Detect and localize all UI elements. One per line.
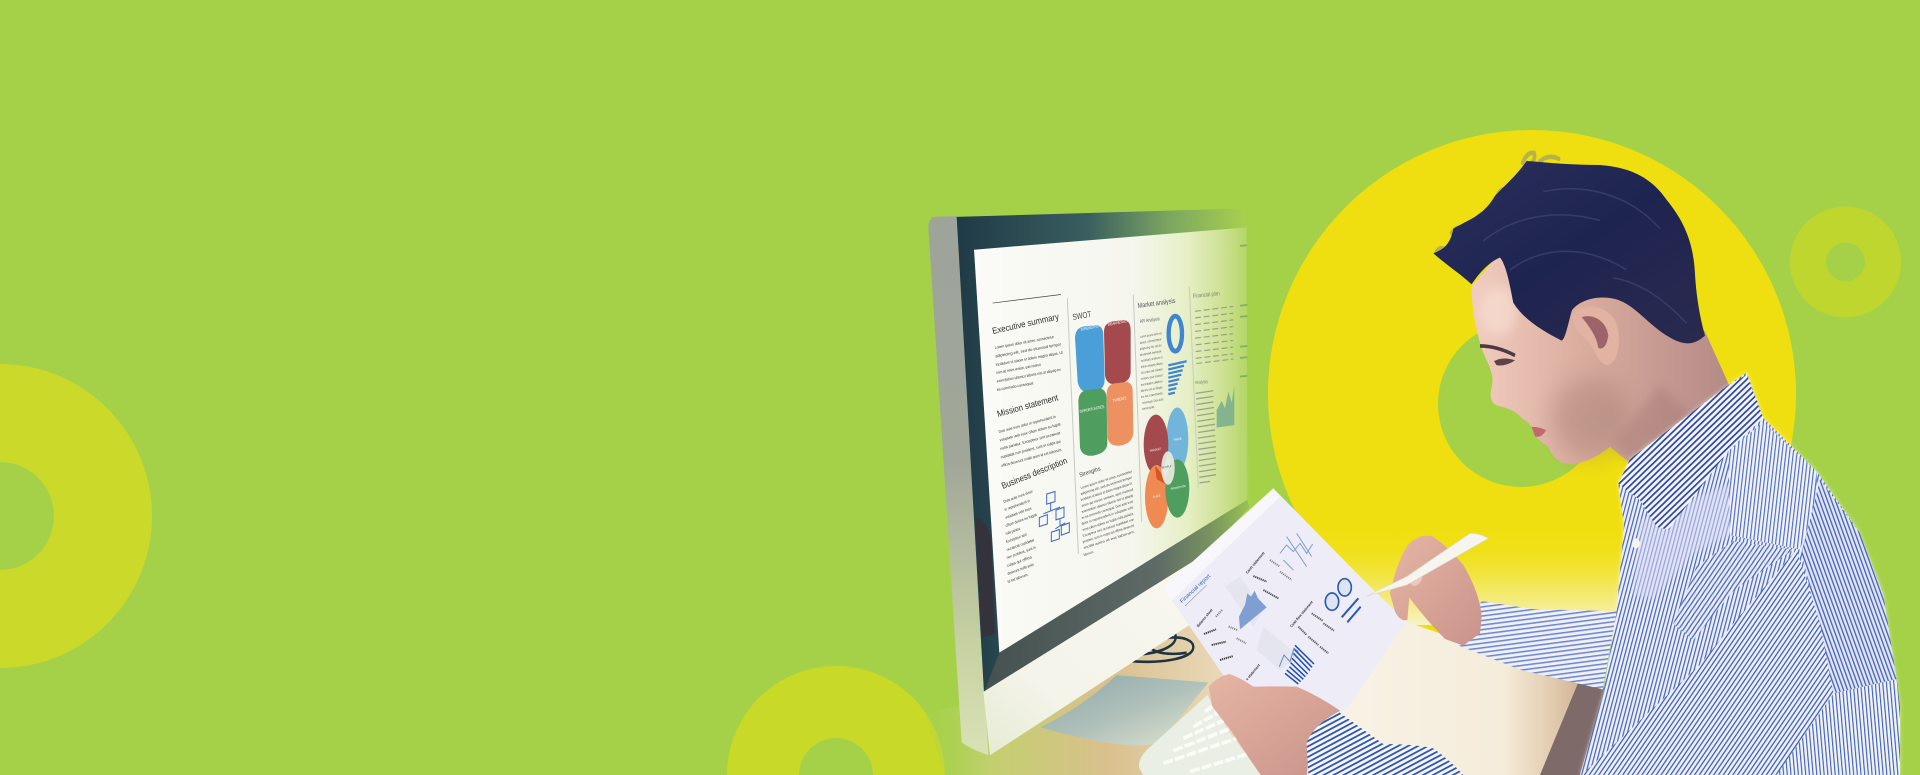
- eye: [1494, 358, 1515, 365]
- analysis text lines: [1196, 391, 1216, 483]
- market analysis column text: amet, consectetur: [1139, 337, 1163, 345]
- glow fading into desk: [1300, 530, 1640, 625]
- left hand: [1209, 674, 1340, 775]
- hair strands: [1483, 189, 1687, 323]
- business description column: deserunt mollit anim: [1007, 562, 1035, 576]
- business description column: id est laborum.: [1007, 572, 1029, 584]
- market analysis column text: ex ea commodo: [1140, 391, 1163, 399]
- business description column: cillum dolore eu fugiat: [1005, 512, 1038, 528]
- mission statement column: Mission statement: [996, 392, 1060, 419]
- SWOT column text: OPPORTUNITIES: [1079, 404, 1105, 414]
- market analysis column text: exercitation ullamco: [1140, 379, 1163, 387]
- hair: [1433, 161, 1705, 343]
- cash flow section: [1289, 600, 1334, 653]
- report title: Financial report: [1179, 573, 1212, 605]
- SWOT column text: incididunt ut labore et dolore magna aliqua Ut: [1080, 481, 1133, 502]
- executive summary column: [991, 311, 1064, 392]
- market analysis column text: PRODUCT: [1149, 447, 1162, 453]
- donut chart: [1169, 316, 1182, 351]
- SWOT column text: [1072, 309, 1136, 557]
- SWOT column text: Lorem ipsum dolor sit amet, consectetur: [1080, 469, 1133, 490]
- paper faint map: [1225, 577, 1300, 670]
- monitor: [928, 209, 1249, 755]
- income statement section: e statement: [1245, 663, 1261, 681]
- mission statement column: voluptate velit esse cillum dolore eu fugiat: [999, 421, 1062, 442]
- cash statement section: [1245, 551, 1292, 598]
- table leg: [1540, 683, 1606, 775]
- market analysis column text: Lorem ipsum dolor sit: [1139, 331, 1162, 339]
- executive summary column: enim ad minim veniam, quis nostrud: [996, 362, 1041, 375]
- desk: [925, 612, 1606, 775]
- cash statement section: Cash statement: [1245, 551, 1266, 575]
- market analysis column text: eiusmod tempor: [1139, 349, 1163, 357]
- shirt button: [1632, 538, 1640, 548]
- market analysis column text: AR Analysis: [1139, 316, 1160, 325]
- screen: [974, 227, 1247, 653]
- business description column: Duis aute irure dolor: [1003, 488, 1034, 504]
- left cuff: [1307, 712, 1463, 775]
- financial plan column text: Analysis: [1195, 379, 1208, 386]
- financial plan table: [1195, 306, 1233, 364]
- mission statement column: Duis aute irure dolor in reprehenderit in: [998, 414, 1056, 434]
- market analysis column text: veniam, quis nostrud: [1140, 373, 1163, 381]
- market analysis column text: PRICE: [1173, 436, 1182, 442]
- SWOT column text: SWOT: [1072, 309, 1092, 322]
- SWOT column text: exercitation ullamco laboris nisi ut aliquip: [1081, 493, 1134, 514]
- executive summary column: incididunt ut labore et dolore magna aliqua. Ut: [995, 350, 1064, 367]
- shirt halo: [1580, 373, 1900, 775]
- market analysis column text: consequat. Duis aute: [1141, 397, 1164, 405]
- SWOT column text: STRENGTHS: [1080, 323, 1099, 332]
- man: [1433, 153, 1900, 775]
- SWOT column text: ex ea commodo consequat. Duis aute irure: [1081, 499, 1134, 520]
- thumb nail: [1407, 569, 1425, 588]
- lower bezel band: [984, 500, 1249, 693]
- executive summary column: exercitation ullamco laboris nisi ut aliquip ex: [996, 367, 1061, 383]
- mission statement column: nulla pariatur. Excepteur sint occaecat: [999, 430, 1061, 451]
- mission statement column: cupidatat non proident, sunt in culpa qui: [1000, 439, 1061, 459]
- line chart: [1280, 533, 1313, 570]
- ring: left: [0, 364, 152, 668]
- shirt upper arm: [1582, 550, 1833, 775]
- SWOT quadrants: [1075, 320, 1133, 456]
- monitor stand: [1040, 675, 1208, 745]
- executive summary column: ea commodo consequat.: [996, 380, 1035, 392]
- shirt shoulder yoke: [1728, 422, 1817, 550]
- lower back panel: [1777, 679, 1900, 775]
- SWOT column text: THREATS: [1112, 395, 1127, 403]
- SWOT column text: WEAKNESSES: [1107, 318, 1129, 327]
- small bars: [1342, 598, 1361, 622]
- large yellow ring: [1268, 130, 1796, 658]
- stubble shadow: [1550, 379, 1630, 457]
- monitor side: [928, 216, 988, 755]
- market analysis column text: consequat.: [1141, 405, 1155, 411]
- right hand: [1390, 536, 1482, 646]
- eyebrow: [1480, 346, 1515, 355]
- SWOT column text: enim ad minim veniam, quis nostrud: [1081, 487, 1134, 508]
- cash flow section: Cash flow statement: [1289, 600, 1314, 628]
- SWOT column text: Excepteur sint occaecat cupidatat non: [1082, 517, 1135, 538]
- left hand and cuff: [1209, 674, 1463, 775]
- business description column: culpa qui officia: [1006, 554, 1033, 568]
- mission statement column: officia deserunt mollit anim id est laborum.: [1000, 447, 1063, 468]
- executive summary column: Executive summary: [991, 311, 1060, 336]
- business description column: non proident, sunt in: [1006, 545, 1036, 560]
- business description column: voluptate velit esse: [1004, 506, 1032, 520]
- ear: [1573, 307, 1619, 365]
- column dividers: [1067, 287, 1198, 554]
- balance sheet section: Balance sheet: [1196, 607, 1214, 628]
- market analysis column text: Ut enim ad minim: [1140, 367, 1163, 375]
- SWOT column text: proident, sunt in culpa qui officia deserunt: [1082, 523, 1135, 544]
- SWOT column text: Strengths: [1079, 466, 1102, 479]
- business description column: occaecat cupidatat: [1006, 537, 1035, 552]
- market analysis column text: incididunt ut labore et: [1140, 355, 1163, 363]
- monitor bezel: [957, 209, 1249, 693]
- forehead highlight: [1480, 286, 1517, 336]
- market analysis column text: laboris nisi ut aliquip: [1140, 385, 1163, 393]
- report paper: [1163, 488, 1407, 711]
- funnel chart: [1168, 361, 1187, 394]
- mouth: [1532, 427, 1546, 437]
- business description column: nulla pariatur.: [1005, 526, 1021, 536]
- business description column: in reprehenderit in: [1004, 498, 1031, 512]
- cables: [1130, 630, 1193, 662]
- reflection on bezel: [975, 518, 995, 638]
- pen: [1367, 533, 1488, 596]
- shirt body: [1580, 373, 1900, 775]
- area chart: [1239, 591, 1267, 629]
- business description column: Excepteur sint: [1005, 531, 1028, 544]
- ring: top right: [1790, 206, 1901, 318]
- forearm sleeve: [1455, 601, 1617, 689]
- SWOT column text: esse cillum dolore eu fugiat nulla pariatur.: [1082, 511, 1135, 532]
- org chart icon: [1039, 491, 1069, 541]
- business description column: [1000, 455, 1069, 584]
- neck and face: [1472, 253, 1730, 465]
- hair curls: [1436, 153, 1559, 281]
- executive summary column: Lorem ipsum dolor sit amet, consectetur: [994, 334, 1055, 350]
- financial plan column text: [1193, 291, 1220, 386]
- mission statement column: [996, 392, 1063, 468]
- executive summary column: adipiscing elit, sed do eiusmod tempor: [995, 341, 1062, 358]
- shirt chest shading: [1633, 484, 1733, 599]
- SWOT column text: dolor in reprehenderit in voluptate velit: [1081, 505, 1134, 526]
- SWOT column text: adipiscing elit, sed do eiusmod tempor: [1080, 475, 1133, 496]
- SWOT column text: mollit anim id est laborum.: [1083, 529, 1136, 550]
- SWOT column text: laborum: [1083, 550, 1094, 557]
- market analysis column text: PROMOTION: [1170, 484, 1186, 491]
- business description column: Business description: [1000, 455, 1069, 491]
- market analysis column text: PLACE: [1152, 493, 1161, 499]
- right edge table marks: [1240, 245, 1247, 377]
- market analysis column text: PEOPLE: [1161, 464, 1172, 470]
- chest pleat: [1673, 541, 1793, 640]
- paper sheet: [1163, 488, 1407, 711]
- right hand and pen: [1367, 533, 1488, 646]
- bar chart: [1285, 645, 1314, 684]
- circle charts: [1325, 579, 1351, 610]
- venn diagram: [1144, 408, 1189, 528]
- monitor text: [991, 291, 1220, 584]
- keyboard: [1139, 695, 1262, 775]
- heading rule: [993, 294, 1061, 303]
- balance sheet section: [1196, 607, 1246, 660]
- financial plan column text: Financial plan: [1193, 291, 1220, 300]
- market analysis column text: Market analysis: [1137, 298, 1176, 310]
- neck shadow: [1613, 385, 1693, 465]
- monitor chin: [983, 551, 1210, 755]
- market analysis column text: adipiscing elit, sed do: [1139, 343, 1162, 351]
- area chart: [1217, 386, 1234, 428]
- collar: [1618, 375, 1763, 530]
- market analysis column text: [1137, 298, 1186, 499]
- shirt back panel: [1802, 480, 1897, 693]
- ring: bottom: [727, 666, 945, 775]
- market analysis column text: dolore magna aliqua: [1140, 361, 1163, 369]
